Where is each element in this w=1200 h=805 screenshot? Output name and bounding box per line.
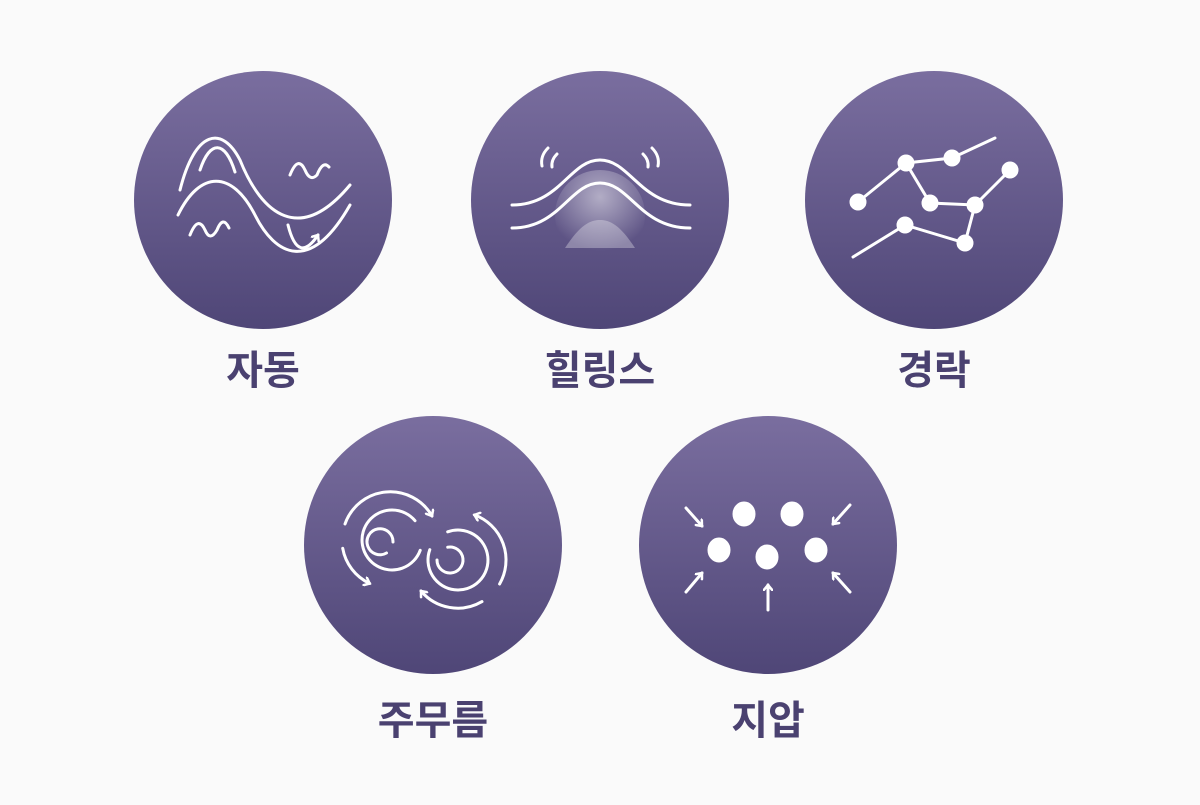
icon: pressure points <box>686 503 850 610</box>
label: 자동 <box>226 349 300 393</box>
label: 힐링스 <box>545 349 655 393</box>
panel: 주무름 <box>304 416 562 743</box>
panel: 지압 <box>639 416 897 743</box>
panel: 자동 <box>134 71 392 393</box>
panel: 힐링스 <box>471 71 729 393</box>
label: 지압 <box>731 699 805 743</box>
label: 주무름 <box>378 699 488 743</box>
panel: 경락 <box>805 71 1063 393</box>
icon: soothing hill <box>512 148 690 260</box>
icon: kneading swirls <box>343 492 506 608</box>
label: 경락 <box>897 349 971 393</box>
icon: meridian network <box>851 138 1017 257</box>
icon: waves <box>178 138 350 251</box>
